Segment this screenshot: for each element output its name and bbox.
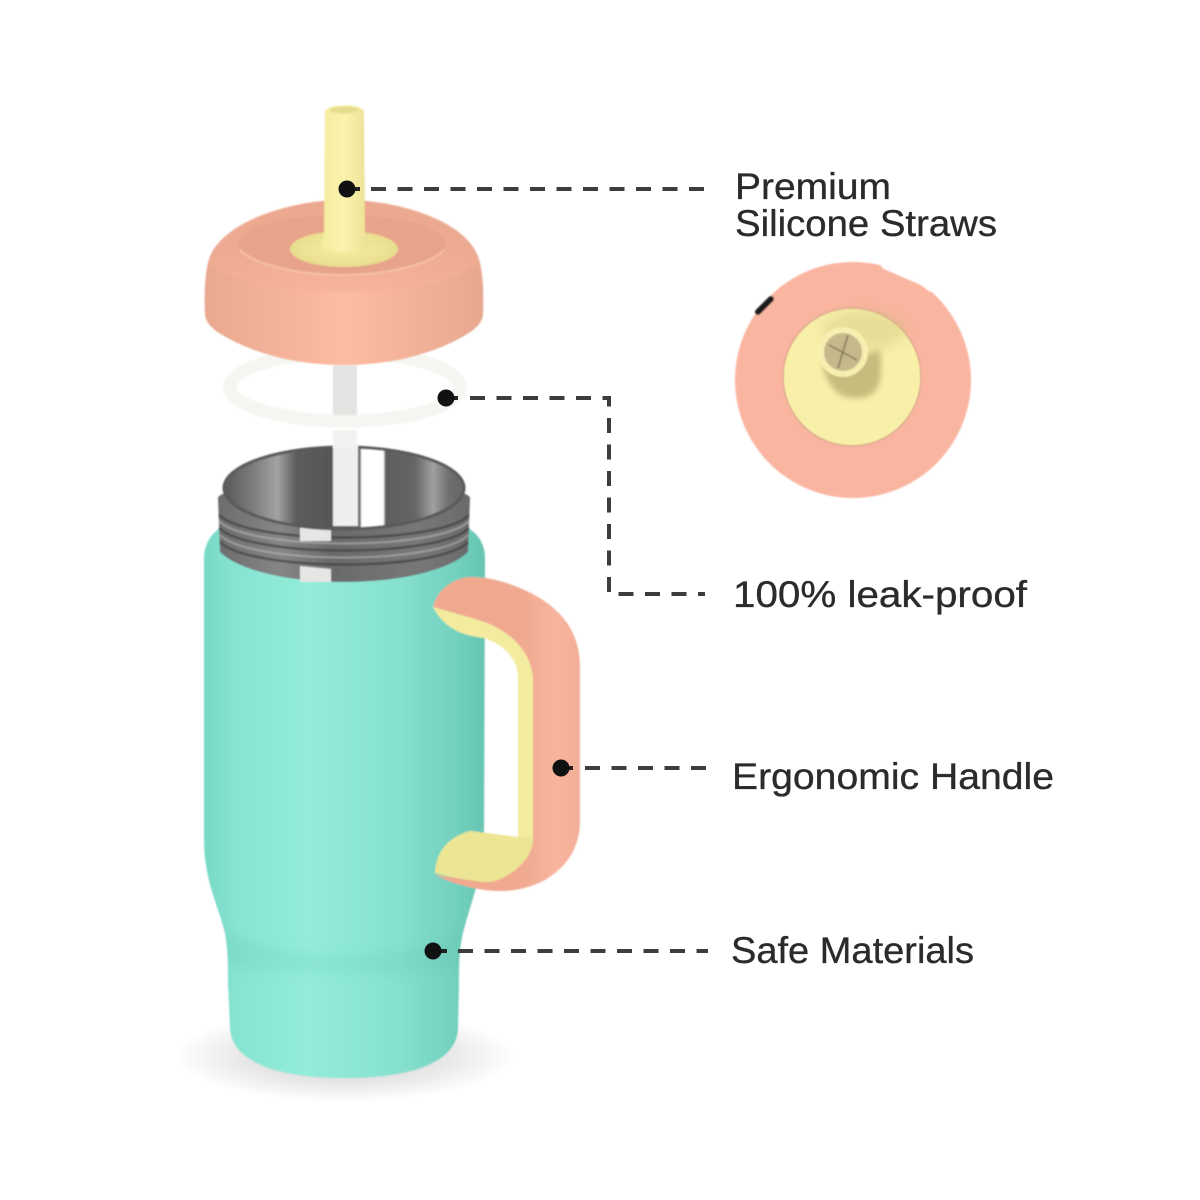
steel threaded neck [218,446,470,582]
ground shadow [175,1010,515,1102]
callout: safe materials [424,930,974,971]
straw bottom detail circle [735,258,971,498]
straw opening [821,330,865,374]
callout: premium silicone straws: Premium [735,166,891,207]
straw base [290,231,398,267]
ergonomic handle [433,577,580,891]
shadow under straw [822,350,881,398]
callout: 100% leak-proof [438,390,1028,615]
lid recess [238,215,446,275]
callout: premium silicone straws [338,166,997,244]
callout: premium silicone straws: Silicone Straws [735,203,997,244]
callout: safe materials: Safe Materials [731,930,974,971]
lid with straw [205,105,483,365]
callout: ergonomic handle: Ergonomic Handle [732,756,1054,797]
neck highlights [300,527,331,582]
tumbler body [204,527,485,1078]
leak-proof seal ring [230,353,460,448]
tumbler illustration [204,446,580,1078]
callout: ergonomic handle [552,756,1054,797]
body fold shading [215,925,475,972]
inner straw [333,446,358,526]
callout: 100% leak-proof: 100% leak-proof [733,574,1028,615]
handle lower grip [435,831,533,882]
lid top surface [208,200,480,292]
interior of tumbler [224,447,464,529]
straw [321,105,368,252]
recess lip highlight [240,250,444,275]
black mark [758,299,771,312]
lid [205,200,483,365]
